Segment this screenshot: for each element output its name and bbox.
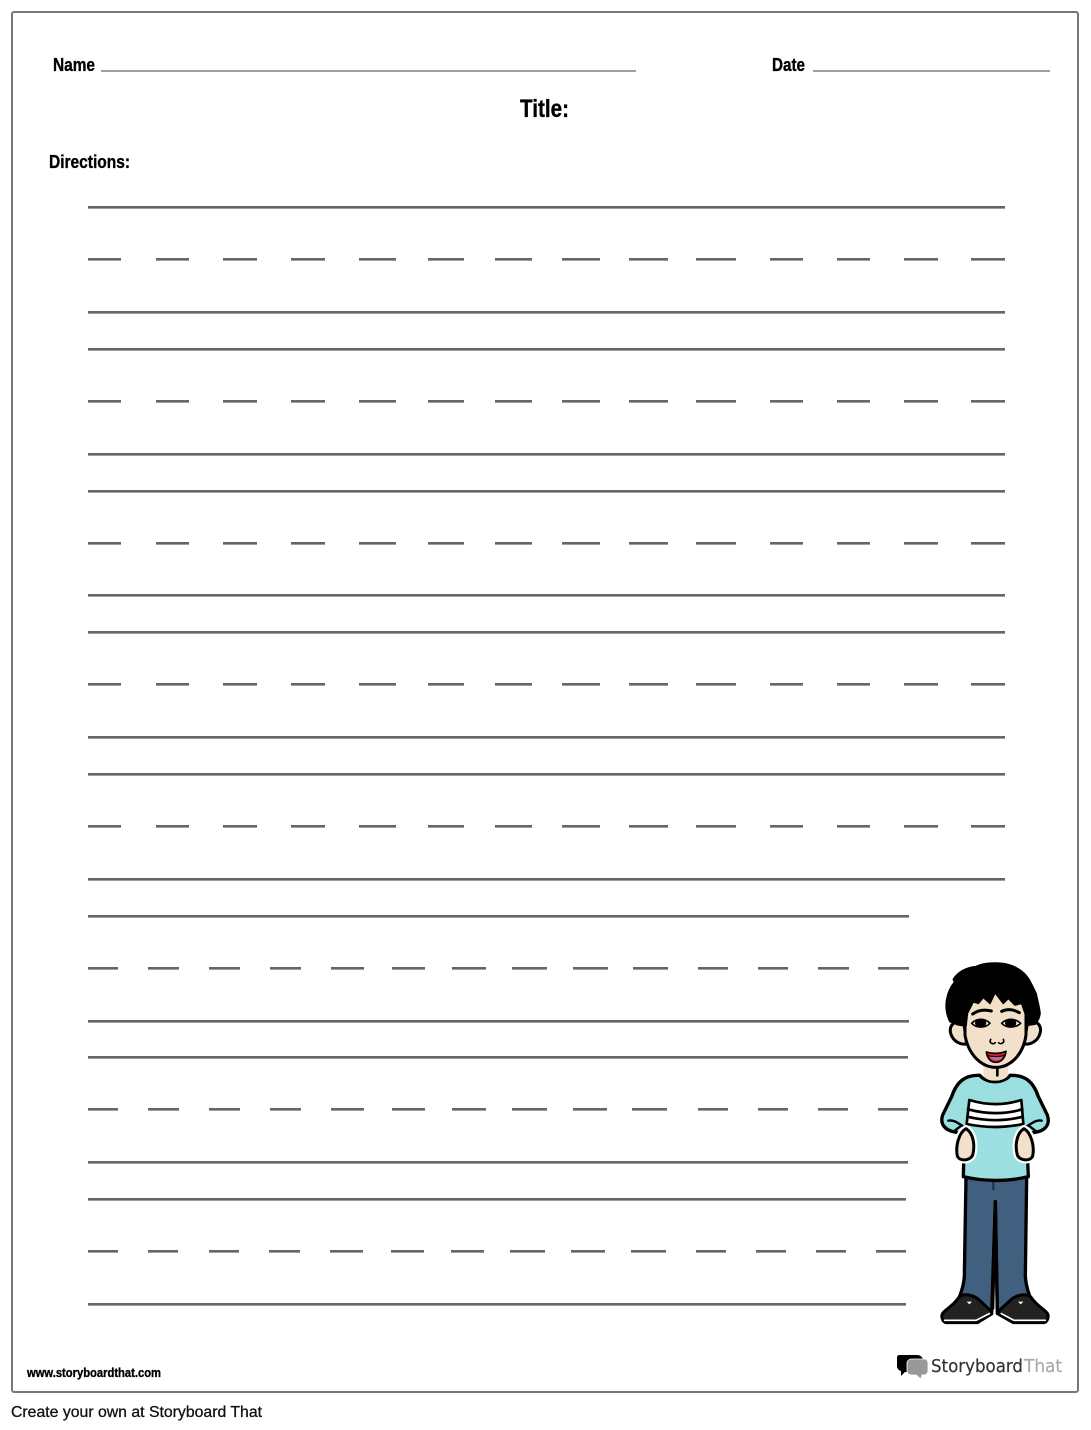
right shoe [998, 1295, 1048, 1323]
neck [983, 1065, 1008, 1081]
handwriting row 1 [88, 207, 1005, 312]
handwriting row 7 [88, 1057, 908, 1162]
character: boy holding paper [942, 963, 1048, 1323]
left ear [950, 1022, 967, 1044]
right eye [1002, 1019, 1021, 1027]
footer url: www.storyboardthat.com [26, 1365, 161, 1380]
left hand [957, 1129, 974, 1160]
right hand [1016, 1129, 1033, 1160]
icon: speech bubbles [897, 1355, 928, 1379]
create your own caption: Create your own at Storyboard That [11, 1404, 263, 1421]
date field: Date [772, 55, 805, 75]
logo wordmark: That: That [1023, 1357, 1062, 1377]
hair [946, 963, 1040, 1026]
logo wordmark: Storyboard [931, 1357, 1023, 1377]
handwriting row 6 [88, 916, 909, 1021]
sleeve cuffs [948, 1120, 1042, 1132]
trouser inseam [993, 1202, 997, 1308]
mouth [986, 1051, 1006, 1062]
belt loop [990, 1182, 997, 1189]
directions label: Directions: [49, 152, 130, 172]
shirt [942, 1075, 1048, 1180]
title heading: Title: [520, 95, 569, 123]
left eye [972, 1019, 990, 1027]
neck outline [981, 1067, 1009, 1082]
paper stripes [967, 1100, 1023, 1127]
handwriting row 2 [88, 349, 1005, 454]
right eyebrow [1002, 1010, 1019, 1013]
left eyebrow [973, 1010, 991, 1014]
storyboard that logo [897, 1355, 1062, 1379]
face [965, 987, 1026, 1067]
handwriting row 8 [88, 1199, 906, 1304]
trousers [956, 1177, 1033, 1313]
right ear [1024, 1022, 1041, 1044]
nose [990, 1039, 1004, 1044]
handwriting row 4 [88, 632, 1005, 737]
name field: Name [53, 55, 95, 75]
handwriting row 3 [88, 491, 1005, 595]
handwriting row 5 [88, 774, 1005, 879]
left shoe [942, 1295, 992, 1323]
